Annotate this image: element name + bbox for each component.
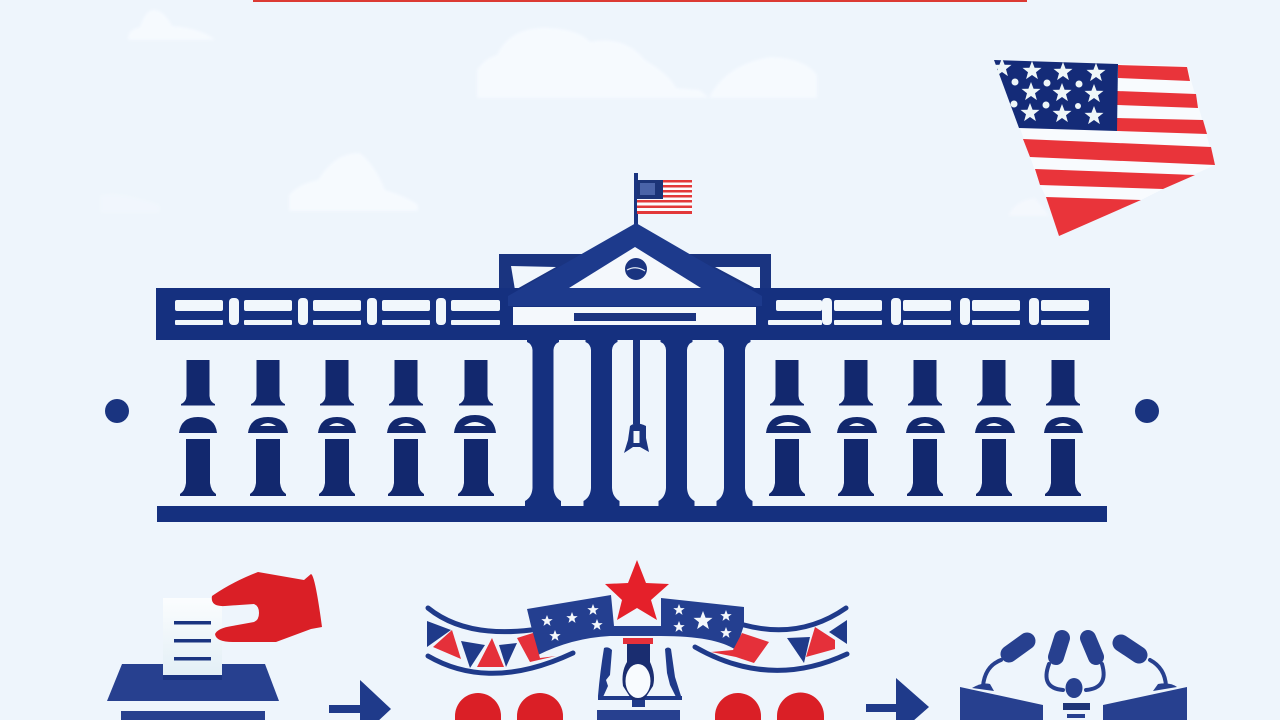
- roof band: [156, 288, 1110, 340]
- speaker hair and outline: [622, 643, 654, 700]
- banner: [527, 595, 744, 655]
- waving American flag: [992, 58, 1215, 236]
- ballot box body: [121, 711, 265, 720]
- White House building: [156, 173, 1110, 522]
- roof band balustrade left: [175, 298, 500, 325]
- red balloons: [455, 692, 824, 720]
- right bunting curves: [695, 608, 847, 670]
- side dot left: [105, 399, 129, 423]
- microphones: [983, 638, 1166, 690]
- ballot box lid: [107, 664, 279, 701]
- left pennants: [427, 621, 556, 668]
- speaker figure: [598, 638, 682, 707]
- attic box behind the pediment: [499, 254, 771, 304]
- podium right: [1103, 687, 1187, 720]
- ballot slot shadow: [163, 670, 222, 680]
- podium top: [597, 710, 680, 720]
- hanging lantern: [624, 340, 649, 453]
- left bunting curves: [428, 608, 573, 673]
- microphone bases: [972, 678, 1177, 718]
- flag stars: [992, 58, 1106, 124]
- arrow one: [329, 680, 391, 720]
- grand columns: [525, 340, 752, 508]
- frieze panel: [513, 307, 756, 325]
- speaker cap: [623, 638, 653, 644]
- rooftop flag: [634, 173, 692, 225]
- right pennants: [711, 620, 847, 663]
- lower windows left and right: [180, 439, 1081, 496]
- star: [605, 560, 669, 620]
- flag white field: [994, 60, 1215, 205]
- side dot right: [1135, 399, 1159, 423]
- roof band balustrade right: [768, 298, 1089, 325]
- flag red stripes: [1023, 65, 1215, 236]
- arrow two: [866, 678, 929, 720]
- upper windows left and right: [181, 360, 1080, 406]
- window arches: [179, 415, 1083, 433]
- red hand: [212, 572, 322, 642]
- window arch highlights: [260, 422, 1071, 426]
- speaker face: [626, 664, 650, 698]
- speaker arms: [598, 647, 682, 707]
- campaign rally icon: [427, 560, 847, 720]
- banner stars: [541, 604, 732, 641]
- clouds: [100, 10, 1050, 216]
- ballot box icon: [107, 572, 322, 720]
- flag canton: [994, 60, 1118, 131]
- foundation: [157, 506, 1107, 522]
- debate podium icon: [960, 638, 1187, 720]
- ballot paper: [163, 598, 222, 675]
- pediment: [508, 223, 762, 306]
- top red rule: [253, 0, 1027, 2]
- podium left: [960, 687, 1043, 720]
